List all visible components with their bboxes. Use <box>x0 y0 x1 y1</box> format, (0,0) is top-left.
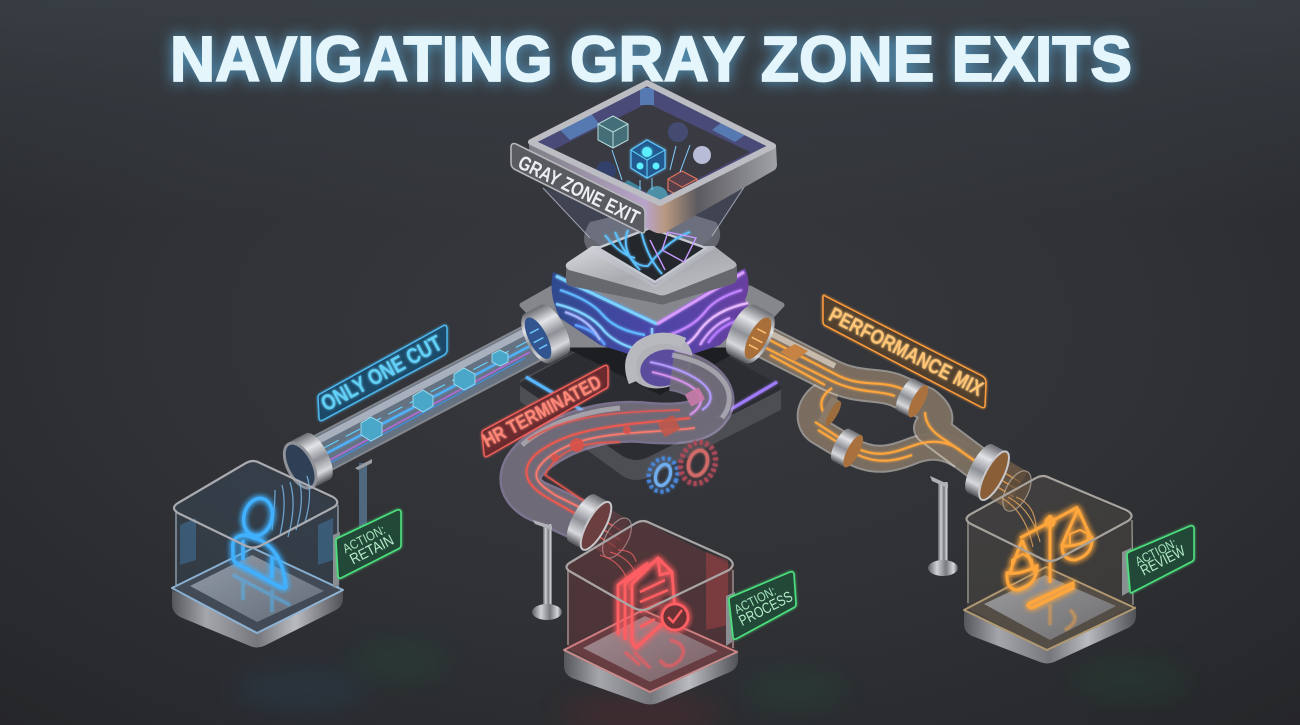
funnel glass body <box>543 178 750 288</box>
bin base <box>172 588 343 648</box>
upper metal tier <box>566 246 737 304</box>
title: NAVIGATING GRAY ZONE EXITS <box>170 23 1132 95</box>
glowing hub <box>552 268 752 355</box>
bin glass <box>567 521 735 692</box>
gears <box>644 437 721 496</box>
ring at hub front <box>631 338 684 382</box>
bin glass <box>967 476 1133 650</box>
icon: balance scale <box>1007 507 1092 608</box>
ring upper <box>892 376 932 420</box>
bin: review <box>964 476 1136 664</box>
support posts <box>355 459 958 620</box>
water stream <box>272 476 310 537</box>
funnel hopper <box>511 83 777 288</box>
label: gray zone exit <box>511 144 645 233</box>
ring at outlet <box>276 429 339 495</box>
gear: blue <box>644 454 682 496</box>
outlet stub <box>995 477 1017 490</box>
funnel interior glass walls <box>531 84 772 200</box>
label: action retain: RETAIN <box>347 532 397 568</box>
ring at hub <box>514 300 577 369</box>
ring at outlet <box>959 440 1015 504</box>
bin rim <box>966 476 1132 561</box>
label: performance mix: PERFORMANCE MIX <box>825 303 987 401</box>
bin base <box>964 606 1136 664</box>
bin base <box>564 650 738 704</box>
scale reflection <box>1050 605 1075 630</box>
label: action review <box>1122 526 1194 596</box>
label: only one cut: ONLY ONE CUT <box>317 330 447 416</box>
bin rim <box>174 461 337 548</box>
outlet mouth <box>597 513 637 563</box>
label: action review: ACTION: <box>1133 535 1179 569</box>
label: hr terminated: HR TERMINATED <box>480 372 605 452</box>
funnel interior floor <box>553 104 750 198</box>
interior highlights <box>560 88 745 142</box>
label: action review: REVIEW <box>1138 542 1189 579</box>
icon: person <box>233 495 286 588</box>
icon: document <box>618 558 688 648</box>
water stream <box>600 550 638 590</box>
pipe: only one cut <box>272 300 577 537</box>
label: action retain: ACTION: <box>340 522 388 556</box>
label: action retain <box>333 510 401 588</box>
funnel front band <box>529 144 777 234</box>
data cubes and spheres <box>596 116 711 208</box>
data cubes in pipe <box>361 350 508 441</box>
gear: red <box>675 437 721 489</box>
person reflection <box>233 575 290 612</box>
funnel metal rim <box>531 83 773 203</box>
water stream <box>1000 497 1040 547</box>
bin: retain <box>172 461 343 648</box>
pipe: hr terminated <box>520 326 729 590</box>
pipe: performance mix <box>719 300 1040 547</box>
ring at outlet <box>561 490 617 554</box>
label: gray zone exit: GRAY ZONE EXIT <box>514 152 643 229</box>
title: NAVIGATING GRAY ZONE EXITS <box>170 23 1132 95</box>
ring left <box>818 396 844 428</box>
label: action process: ACTION: <box>732 583 778 617</box>
ring lower <box>827 426 867 470</box>
bin: process <box>564 521 738 704</box>
label: action process: PROCESS <box>736 588 796 630</box>
bin rim <box>566 521 733 610</box>
bin glass <box>175 461 340 633</box>
ring at hub <box>719 300 782 369</box>
silver plate under hub <box>522 288 782 345</box>
document reflection <box>625 640 683 668</box>
central base slab <box>523 315 778 477</box>
label: action process <box>726 572 796 646</box>
outlet mouth <box>997 466 1037 516</box>
ring at hub back <box>621 326 699 396</box>
outlet stub <box>598 526 618 538</box>
